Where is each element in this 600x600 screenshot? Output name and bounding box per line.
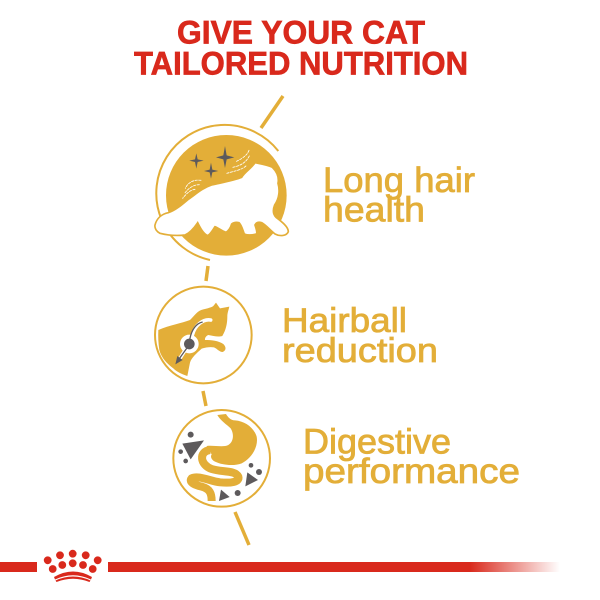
title — [134, 14, 468, 82]
hair strokes — [183, 150, 249, 198]
text: long hair health: Long hair — [323, 160, 475, 200]
text: long hair health — [323, 160, 475, 230]
red band: left — [0, 562, 37, 572]
connector: bottom — [235, 512, 249, 545]
title: GIVE YOUR CAT — [177, 14, 425, 50]
text: digestive performance — [303, 422, 520, 491]
text: digestive performance: performance — [303, 452, 520, 491]
connector: middle lower — [203, 391, 206, 406]
sparkles — [189, 146, 234, 179]
text: long hair health: health — [323, 190, 425, 230]
digestive markers — [178, 432, 262, 501]
connector: middle upper — [206, 266, 208, 281]
connector: top — [261, 96, 283, 128]
text: hairball reduction — [282, 302, 438, 370]
title: TAILORED NUTRITION — [134, 46, 468, 82]
logo: crown — [44, 550, 102, 582]
icon: hairball cat — [155, 287, 252, 383]
icon: long hair cat — [155, 125, 288, 260]
text: hairball reduction: reduction — [282, 332, 438, 370]
text: digestive performance: Digestive — [303, 422, 451, 462]
text: hairball reduction: Hairball — [282, 302, 407, 340]
icon: digestive system — [173, 410, 270, 507]
red band: right — [108, 562, 560, 572]
